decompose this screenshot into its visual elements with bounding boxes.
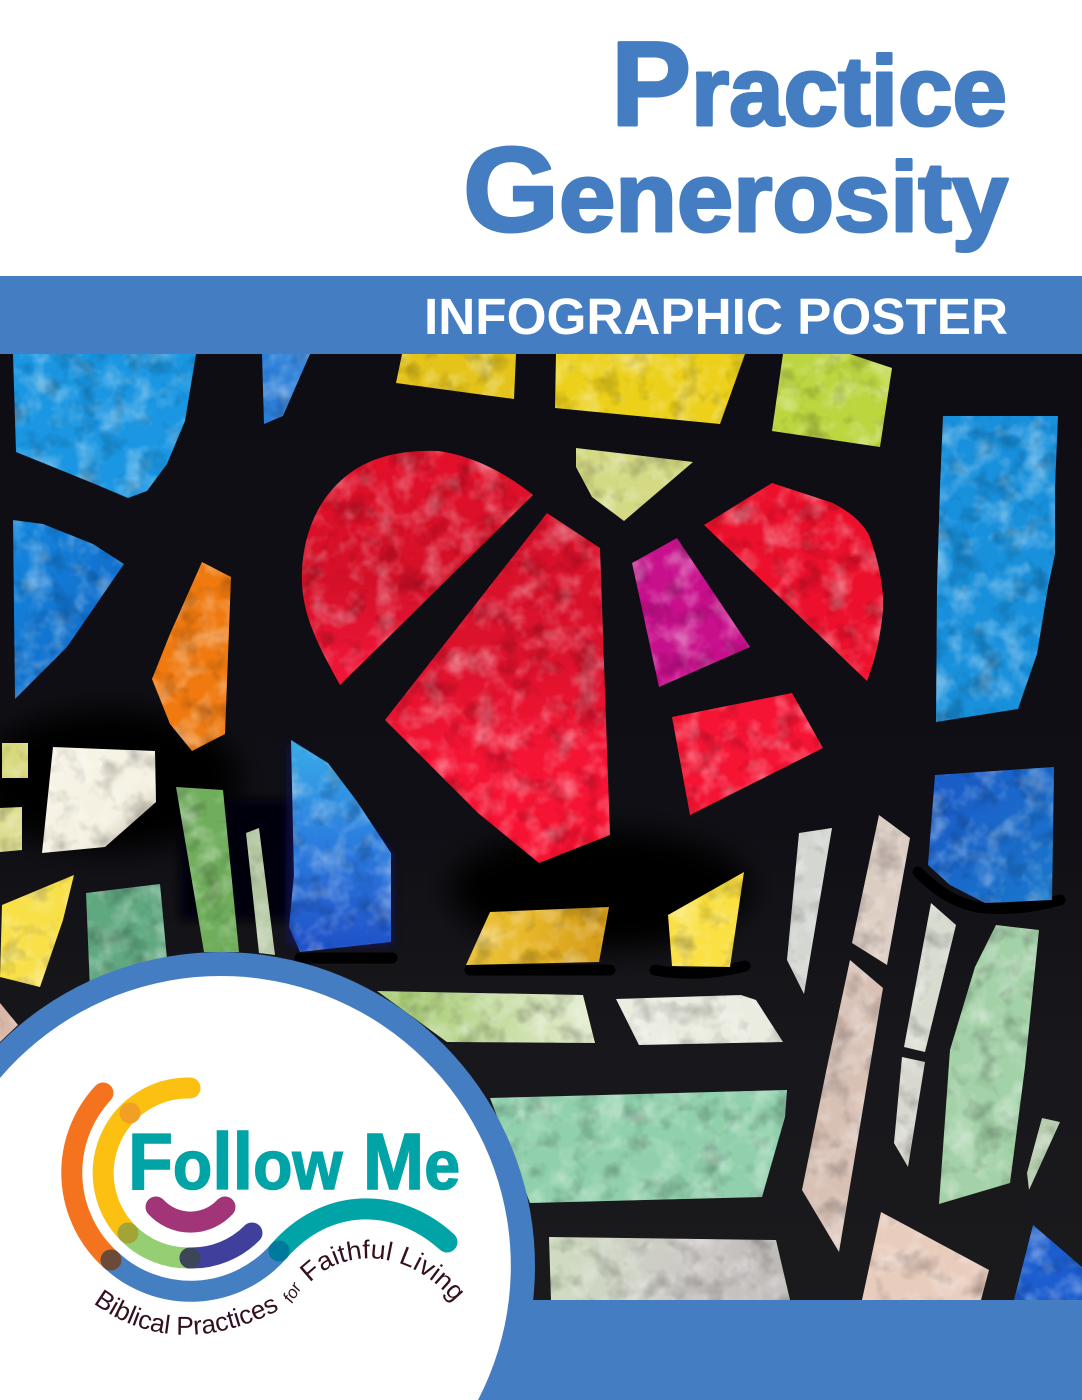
logo: Follow Me bbox=[61, 1078, 464, 1335]
glass shards, right bbox=[787, 416, 1082, 1300]
logo arc: green bbox=[128, 1233, 190, 1258]
logo badge circle bbox=[0, 952, 535, 1400]
subtitle: INFOGRAPHIC POSTER bbox=[424, 288, 1008, 345]
bottom band bbox=[0, 1300, 1082, 1400]
logo arc: indigo bbox=[190, 1233, 252, 1258]
heart of red and magenta glass bbox=[302, 451, 883, 863]
logo tagline curves bbox=[93, 1258, 452, 1335]
glass shards, left bbox=[0, 520, 391, 1042]
logo arc: magenta smile bbox=[156, 1207, 225, 1222]
stained glass photo bbox=[0, 354, 1082, 1300]
title line: Practice: Practice bbox=[611, 17, 1007, 151]
logo arc: orange bbox=[72, 1093, 111, 1260]
logo overlap dots bbox=[100, 1102, 290, 1270]
blue and yellow glass, top bbox=[13, 354, 892, 521]
subtitle band bbox=[0, 276, 1082, 354]
glass shards, centre bbox=[377, 872, 790, 1300]
title bbox=[463, 17, 1008, 257]
logo arc: teal wave bbox=[279, 1209, 447, 1251]
logo arc: blue wave bbox=[111, 1251, 279, 1291]
title line: Generosity: Generosity bbox=[463, 123, 1008, 257]
logo arc: yellow bbox=[103, 1088, 190, 1233]
logo wordmark: Follow Me bbox=[128, 1117, 460, 1206]
logo tagline: Faithful Living: Faithful Living bbox=[300, 1240, 464, 1303]
dark shadows and glow behind the glass bbox=[0, 710, 1060, 973]
logo tagline: Biblical Practices bbox=[94, 1290, 278, 1335]
logo tagline: for: for bbox=[284, 1282, 300, 1304]
